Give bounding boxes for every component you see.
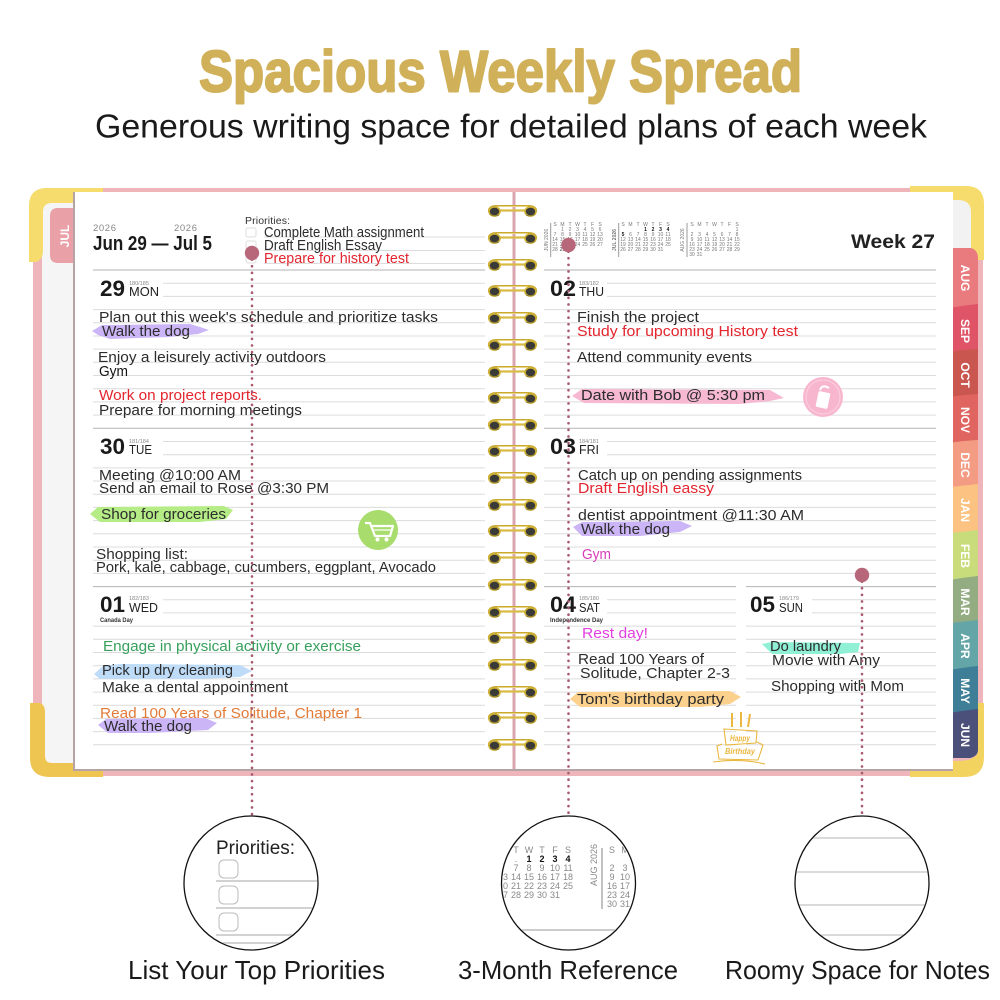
- mini calendar: June: 6: [599, 227, 602, 233]
- day: Tuesday 30: Meeting @10:00 AM: [99, 468, 241, 484]
- day: Saturday 04: Independence Day: [550, 618, 604, 624]
- mini calendar: June: 9: [569, 232, 572, 238]
- detail circle: calendar: 17: [550, 872, 560, 882]
- day: Friday 03: Draft English eassy: [578, 481, 715, 497]
- mini calendar: August: AUG 2026: [680, 228, 686, 252]
- detail circle: calendar: 21: [511, 881, 521, 891]
- highlight: green: [90, 506, 233, 522]
- detail circle: calendar: T: [513, 845, 519, 855]
- mini calendar: June: 11: [582, 232, 588, 238]
- detail circle: calendar: 15: [524, 872, 534, 882]
- mini calendar: July: 23: [650, 242, 656, 248]
- day: Tuesday 30: 181/184: [129, 439, 149, 445]
- mini calendar: June: 29: [560, 247, 565, 253]
- mini calendar: July: 25: [665, 242, 671, 248]
- mini calendar: June: 17: [575, 237, 580, 243]
- day: Saturday 04: [550, 592, 765, 764]
- mini calendar: July: 4: [667, 227, 670, 233]
- week number: Week 27: [851, 232, 935, 253]
- day: Wednesday 01: 01: [100, 592, 125, 617]
- mini calendar: August: S: [690, 222, 694, 228]
- highlight: blue: [94, 664, 252, 679]
- day: Wednesday 01: [94, 592, 362, 735]
- detail circle: calendar: 24: [620, 890, 630, 900]
- caption: priorities: List Your Top Priorities: [128, 955, 385, 985]
- day: Saturday 04: Read 100 Years of: [578, 652, 705, 668]
- icon: shopping cart: [358, 510, 398, 550]
- tab: JAN: JAN: [958, 498, 972, 522]
- detail circle: calendar: 30: [607, 899, 617, 909]
- mini calendar: June: 20: [597, 237, 603, 243]
- detail circle: calendar: 24: [550, 881, 560, 891]
- mini calendar: July: 26: [620, 247, 626, 253]
- mini calendar: June: 19: [590, 237, 595, 243]
- day: Thursday 02: 183/182: [579, 281, 599, 287]
- mini calendar: August: 3: [698, 232, 701, 238]
- page: [75, 192, 953, 769]
- mini calendar: June: 7: [554, 232, 557, 238]
- day: Thursday 02: Date with Bob @ 5:30 pm: [581, 388, 765, 404]
- mini calendar: August: 5: [713, 232, 716, 238]
- priorities list: Complete Math assignment: [264, 225, 424, 241]
- connector: priorities: [245, 246, 259, 815]
- mini calendar: August: 1: [736, 227, 739, 233]
- mini calendar: July: 28: [635, 247, 641, 253]
- detail circle: calendar: 29: [524, 890, 534, 900]
- tab: NOV: NOV: [958, 407, 972, 433]
- detail circle: calendar: 23: [607, 890, 617, 900]
- caption: reference: 3-Month Reference: [458, 955, 678, 985]
- day: Sunday 05: Movie with Amy: [772, 653, 881, 669]
- detail circle: notes lines: [790, 816, 935, 950]
- mini calendar: July: 27: [628, 247, 633, 253]
- mini calendar: August: 19: [712, 242, 717, 248]
- mini calendar: August: 18: [704, 242, 710, 248]
- detail circle: calendar: 25: [563, 881, 573, 891]
- detail circle: calendar: 30: [537, 890, 547, 900]
- mini calendar: June: 3: [576, 227, 579, 233]
- detail circle: calendar: 4: [565, 854, 571, 864]
- mini calendar: August: 10: [697, 237, 702, 243]
- gold corner: top right: [910, 186, 984, 260]
- mini calendar: August: 20: [719, 242, 725, 248]
- detail circle: calendar: 10: [620, 872, 630, 882]
- mini calendar: August: 6: [721, 232, 724, 238]
- day: Friday 03: [550, 434, 804, 563]
- mini calendar: June: 14: [552, 237, 558, 243]
- mini calendar: June: 4: [584, 227, 587, 233]
- detail circle: calendar: 2: [609, 863, 615, 873]
- icon: birthday cake: Birthday: [725, 746, 756, 756]
- tab: AUG: [950, 248, 978, 308]
- mini calendar: August: 14: [727, 237, 732, 243]
- mini calendar: August: 8: [736, 232, 739, 238]
- mini calendar: August: 27: [719, 247, 725, 253]
- mini calendar: June: 25: [582, 242, 588, 248]
- detail circle: calendar: 31: [550, 890, 560, 900]
- mini calendar: July: 10: [658, 232, 663, 238]
- detail circle: calendar: 2: [539, 854, 545, 864]
- mini calendar: June: 30: [567, 247, 573, 253]
- day: Sunday 05: SUN: [779, 601, 803, 615]
- mini calendar: June: 5: [591, 227, 594, 233]
- mini calendar: August: M: [697, 222, 702, 228]
- spiral binding: [489, 206, 536, 750]
- tab: SEP: [950, 304, 978, 352]
- day: Saturday 04: 04: [550, 592, 577, 617]
- date range header: 2026: [93, 223, 116, 234]
- detail circle: calendar: 11: [563, 863, 573, 873]
- day: Wednesday 01: Pick up dry cleaning: [102, 663, 233, 679]
- detail circle: calendar: 18: [563, 872, 573, 882]
- detail circle: calendar: 31: [620, 899, 630, 909]
- day: Monday 29: 180/185: [129, 281, 149, 287]
- mini calendar: July: 14: [635, 237, 641, 243]
- day: Tuesday 30: [90, 434, 436, 576]
- detail circle: calendar: S: [609, 845, 615, 855]
- detail circle: priorities: [184, 816, 330, 950]
- mini calendar: August: F: [728, 222, 731, 228]
- mini calendar: August: 21: [727, 242, 732, 248]
- detail circle: calendar: S: [565, 845, 571, 855]
- mini calendar: July: 11: [665, 232, 671, 238]
- mini calendar: June: 10: [575, 232, 580, 238]
- mini calendar: July: 31: [658, 247, 663, 253]
- day: Sunday 05: Do laundry: [770, 639, 842, 655]
- detail circle: calendar: 20: [498, 881, 508, 891]
- planner cover: [33, 188, 983, 776]
- mini calendar: June: 24: [575, 242, 580, 248]
- day: Wednesday 01: Make a dental appointment: [102, 680, 288, 696]
- detail circle: calendar: 10: [550, 863, 560, 873]
- day: Monday 29: Work on project reports.: [99, 388, 262, 404]
- title: Spacious Weekly Spread: [199, 40, 802, 104]
- mini calendar: June: 21: [552, 242, 558, 248]
- tab: OCT: [950, 349, 978, 397]
- detail circle: calendar: .: [515, 854, 517, 864]
- mini calendar: August: 28: [727, 247, 732, 253]
- mini calendar: July: 5: [622, 232, 625, 238]
- tab: JAN: [950, 484, 978, 533]
- mini calendar: July: [612, 222, 671, 257]
- mini calendar: June: 16: [567, 237, 573, 243]
- mini calendar: June: [544, 222, 603, 257]
- detail circle: calendar: M: [621, 845, 629, 855]
- detail circle: calendar: F: [552, 845, 558, 855]
- detail circle: calendar: 16: [537, 872, 547, 882]
- mini calendar: July: 15: [643, 237, 648, 243]
- detail circle: calendar: 3: [552, 854, 558, 864]
- detail circle: calendar: 7: [513, 863, 519, 873]
- tab: NOV: [950, 394, 978, 443]
- mini calendar: June: F: [591, 222, 594, 228]
- mini calendar: August: 7: [728, 232, 731, 238]
- mini calendar: August: 15: [734, 237, 740, 243]
- mini calendar: August: 2: [691, 232, 694, 238]
- priorities list: Prepare for history test: [264, 251, 409, 267]
- detail circle: calendar: 16: [607, 881, 617, 891]
- day: Monday 29: Walk the dog: [102, 324, 190, 340]
- date range header: Jun 29 — Jul 5: [93, 233, 212, 255]
- mini calendar: June: S: [598, 222, 602, 228]
- mini calendar: July: T: [651, 222, 655, 228]
- mini calendar: August: 30: [689, 252, 695, 258]
- mini calendar: August: 22: [734, 242, 740, 248]
- mini calendar: June: 1: [561, 227, 564, 233]
- mini calendar: July: 24: [658, 242, 663, 248]
- gold corner: bottom left: [30, 703, 103, 777]
- mini calendar: June: 22: [560, 242, 565, 248]
- mini calendar: August: T: [705, 222, 709, 228]
- mini calendar: August: 4: [706, 232, 709, 238]
- highlight: purple: [92, 324, 209, 339]
- tab: APR: APR: [958, 633, 972, 659]
- day: Monday 29: Prepare for morning meetings: [99, 403, 302, 419]
- day: Monday 29: Plan out this week's schedule and prioritize tasks: [99, 310, 438, 326]
- date range header: 2026: [174, 223, 197, 234]
- day: Thursday 02: Attend community events: [577, 350, 752, 366]
- mini calendar: August: 16: [689, 242, 695, 248]
- day: Sunday 05: Shopping with Mom: [771, 679, 904, 695]
- day: Wednesday 01: 182/183: [129, 596, 149, 602]
- tab: JUN: JUN: [958, 723, 972, 747]
- gold corner: top left: [29, 188, 103, 262]
- day: Monday 29: Enjoy a leisurely activity outdoors: [98, 350, 326, 366]
- highlight: teal: [762, 642, 860, 654]
- mini calendar: August: [680, 222, 740, 258]
- day: Tuesday 30: Send an email to Rose @3:30 PM: [99, 481, 329, 497]
- day: Tuesday 30: 30: [100, 434, 125, 459]
- mini calendar: July: W: [643, 222, 648, 228]
- highlight: purple: [573, 521, 692, 536]
- day: Thursday 02: Study for upcoming History test: [577, 324, 798, 340]
- detail circle: calendar: [498, 816, 640, 950]
- mini calendar: July: M: [628, 222, 633, 228]
- mini calendar: June: S: [553, 222, 557, 228]
- day: Saturday 04: SAT: [579, 601, 600, 615]
- mini calendar: June: 8: [561, 232, 564, 238]
- mini calendar: July: 9: [652, 232, 655, 238]
- day: Saturday 04: Rest day!: [582, 626, 648, 642]
- mini calendar: July: 7: [637, 232, 640, 238]
- detail circle: calendar: 23: [537, 881, 547, 891]
- detail circle: calendar: 8: [526, 863, 532, 873]
- day: Sunday 05: [750, 592, 904, 695]
- mini calendar: July: 1: [644, 227, 647, 233]
- priorities list: [245, 215, 424, 267]
- mini calendar: July: 13: [628, 237, 633, 243]
- mini calendar: June: W: [575, 222, 580, 228]
- mini calendar: August: 12: [712, 237, 717, 243]
- icon: birthday cake: [713, 712, 765, 764]
- icon: birthday cake: Happy: [730, 733, 751, 743]
- tab: FEB: [950, 530, 978, 580]
- day: Friday 03: Gym: [582, 547, 611, 563]
- detail circle: calendar: 22: [524, 881, 534, 891]
- mini calendar: June: JUN 2026: [544, 229, 550, 251]
- day: Friday 03: 03: [550, 434, 576, 459]
- mini calendar: August: 26: [712, 247, 717, 253]
- day: Friday 03: 184/181: [579, 439, 599, 445]
- mini calendar: July: 12: [620, 237, 626, 243]
- mini calendar: July: F: [659, 222, 662, 228]
- mini calendar: July: 22: [643, 242, 648, 248]
- mini calendar: June: 18: [582, 237, 588, 243]
- tab: OCT: OCT: [958, 362, 972, 388]
- mini calendar: June: T: [568, 222, 572, 228]
- day: Monday 29: MON: [129, 285, 159, 299]
- mini calendar: August: 24: [697, 247, 702, 253]
- mini calendar: August: 13: [719, 237, 725, 243]
- tab: AUG: AUG: [958, 265, 972, 291]
- mini calendar: July: 16: [650, 237, 656, 243]
- day: Thursday 02: THU: [579, 285, 604, 299]
- detail circle: priorities: Priorities:: [216, 838, 295, 859]
- mini calendar: August: 29: [734, 247, 740, 253]
- date range header: [93, 223, 212, 255]
- mini calendar: August: 17: [697, 242, 702, 248]
- day: Wednesday 01: Canada Day: [100, 618, 134, 624]
- mini calendar: August: 11: [704, 237, 710, 243]
- mini calendar: June: 28: [552, 247, 558, 253]
- day: Thursday 02: [550, 276, 843, 417]
- day: Friday 03: dentist appointment @11:30 AM: [578, 508, 804, 524]
- day: Sunday 05: 05: [750, 592, 775, 617]
- mini calendar: August: 25: [704, 247, 710, 253]
- mini calendar: July: 19: [620, 242, 626, 248]
- mini calendar: August: 9: [691, 237, 694, 243]
- detail circle: calendar: T: [539, 845, 545, 855]
- mini calendar: June: 12: [590, 232, 595, 238]
- detail circle: calendar: 14: [511, 872, 521, 882]
- priorities list: Priorities:: [245, 215, 290, 227]
- tab: JUN: [950, 709, 978, 758]
- mini calendar: August: S: [735, 222, 739, 228]
- day: Sunday 05: 186/179: [779, 596, 799, 602]
- day: Monday 29: [92, 276, 438, 419]
- icon: pink tag: [803, 377, 843, 417]
- tab: APR: [950, 620, 978, 670]
- mini calendar: July: 3: [659, 227, 662, 233]
- priorities list: Draft English Essay: [264, 238, 383, 254]
- day: Saturday 04: Solitude, Chapter 2-3: [580, 666, 730, 682]
- mini calendar: July: 2: [652, 227, 655, 233]
- day: Monday 29: Gym: [99, 364, 128, 380]
- tab: MAY: [950, 666, 978, 713]
- tab: DEC: DEC: [958, 452, 972, 478]
- mini calendar: August: 23: [689, 247, 695, 253]
- day: Saturday 04: Tom's birthday party: [577, 692, 725, 708]
- mini calendar: June: 27: [597, 242, 603, 248]
- connector: 3-month reference: [561, 238, 576, 815]
- tab: MAR: [950, 576, 978, 623]
- subtitle: Generous writing space for detailed plans of each week: [95, 108, 928, 144]
- detail circle: calendar: 1: [526, 854, 532, 864]
- day: Wednesday 01: Walk the dog: [104, 719, 192, 735]
- mini calendar: June: 26: [590, 242, 595, 248]
- day: Friday 03: FRI: [579, 443, 599, 457]
- detail circle: calendar: 27: [498, 890, 508, 900]
- tab: JUL: [50, 208, 75, 263]
- mini calendar: July: S: [621, 222, 625, 228]
- mini calendar: August: 31: [697, 252, 702, 258]
- mini calendar: June: 23: [567, 242, 573, 248]
- day: Wednesday 01: WED: [129, 601, 158, 615]
- day: Monday 29: 29: [100, 276, 125, 301]
- mini calendar: July: 17: [658, 237, 663, 243]
- day: Thursday 02: Finish the project: [577, 310, 699, 326]
- day: Friday 03: Catch up on pending assignments: [578, 468, 802, 484]
- detail circle: calendar: AUG 2026: [589, 844, 599, 886]
- mini calendar: July: 21: [635, 242, 641, 248]
- mini calendar: June: 13: [597, 232, 603, 238]
- month tabs: [950, 248, 978, 758]
- detail circle: calendar: 3: [622, 863, 628, 873]
- mini calendar: July: JUL 2026: [612, 229, 618, 251]
- mini calendar: July: 29: [643, 247, 648, 253]
- spine: [512, 192, 516, 769]
- detail circle: calendar: 17: [620, 881, 630, 891]
- mini calendar: July: 8: [644, 232, 647, 238]
- day: Tuesday 30: TUE: [129, 443, 152, 457]
- caption: notes: Roomy Space for Notes: [725, 955, 990, 985]
- highlight: orange: [570, 691, 741, 707]
- mini calendar: July: S: [666, 222, 670, 228]
- mini calendar: July: 6: [629, 232, 632, 238]
- mini calendar: July: 30: [650, 247, 656, 253]
- day: Thursday 02: 02: [550, 276, 576, 301]
- mini calendar: June: 2: [569, 227, 572, 233]
- mini calendar: August: T: [720, 222, 724, 228]
- mini calendar: June: M: [560, 222, 565, 228]
- tab: MAR: MAR: [958, 588, 972, 616]
- tab: DEC: [950, 440, 978, 487]
- page shadow: [73, 192, 953, 771]
- tab: JUL: JUL: [58, 225, 72, 247]
- mini calendar: July: 20: [628, 242, 633, 248]
- day: Tuesday 30: Shopping list:: [96, 547, 188, 563]
- day: Tuesday 30: Pork, kale, cabbage, cucumbers, eggplant, Avocado: [96, 560, 436, 576]
- day: Wednesday 01: Engage in physical activity or exercise: [103, 639, 361, 655]
- detail circle: calendar: 9: [539, 863, 545, 873]
- connector: roomy notes: [855, 568, 869, 815]
- tab: MAY: MAY: [958, 678, 972, 704]
- day: Tuesday 30: Shop for groceries: [101, 507, 226, 523]
- day: Saturday 04: 185/180: [579, 596, 599, 602]
- highlight: pink: [572, 389, 784, 404]
- tab: FEB: FEB: [958, 544, 972, 568]
- ruled lines: [93, 237, 936, 745]
- detail circle: calendar: 28: [511, 890, 521, 900]
- mini calendar: July: T: [636, 222, 640, 228]
- mini calendar: June: T: [583, 222, 587, 228]
- highlight: purple: [98, 718, 217, 733]
- mini calendar: July: 18: [665, 237, 671, 243]
- tab: SEP: SEP: [958, 319, 972, 343]
- mini calendar: August: W: [712, 222, 717, 228]
- gold corner: bottom right: [910, 703, 984, 777]
- day: Wednesday 01: Read 100 Years of Solitude, Chapter 1: [100, 706, 362, 722]
- detail circle: calendar: 13: [498, 872, 508, 882]
- mini calendar: June: 15: [560, 237, 565, 243]
- detail circle: calendar: 9: [609, 872, 615, 882]
- detail circle: calendar: W: [525, 845, 534, 855]
- day: Friday 03: Walk the dog: [581, 522, 670, 538]
